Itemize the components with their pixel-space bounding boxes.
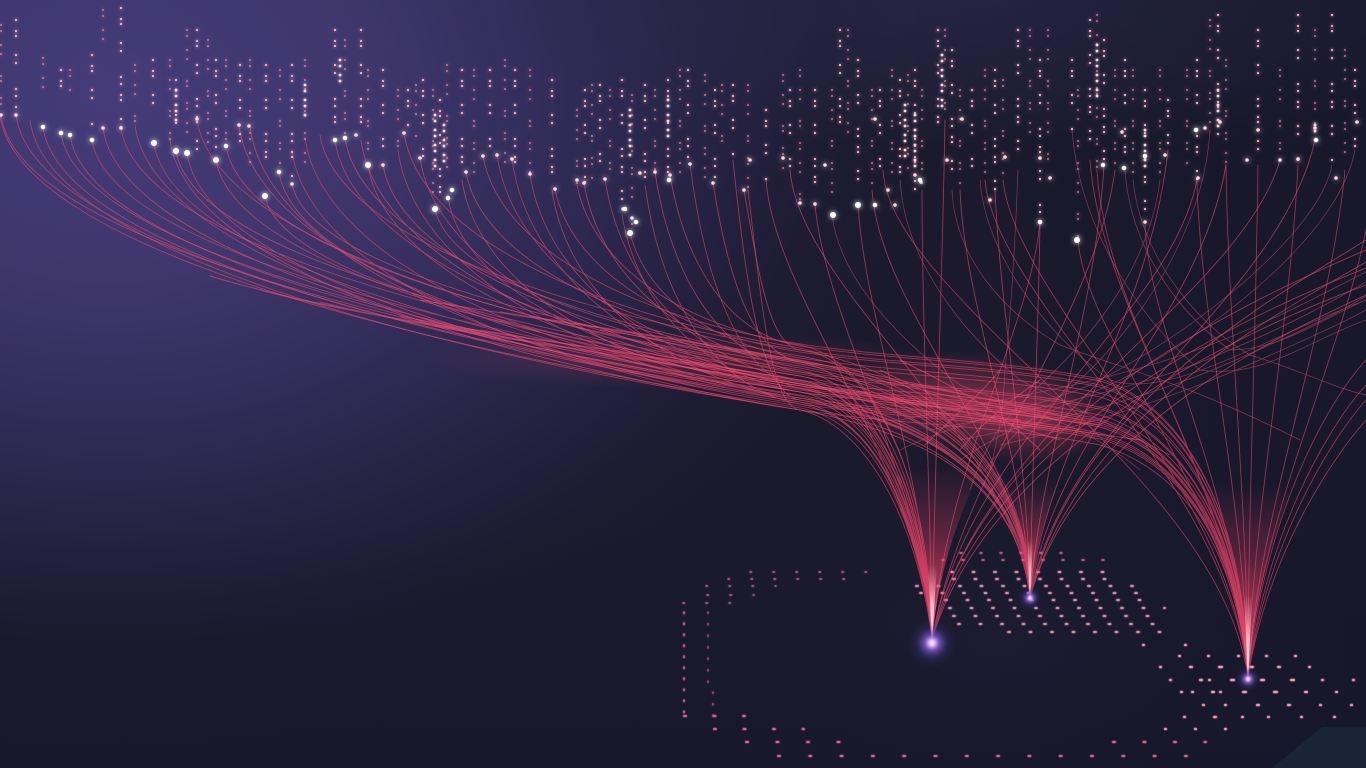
- stream curves into middle source: [1, 115, 1366, 598]
- middle source fan: [1005, 481, 1058, 610]
- crossing haze: [420, 332, 1120, 465]
- stream curves crossing toward upper right: [832, 130, 1366, 490]
- right source fan: [1195, 483, 1292, 692]
- bright end dots: [1, 115, 1357, 240]
- floor dot grid: [683, 553, 1354, 756]
- stream curves into right source: [16, 115, 1366, 678]
- stream curves into left source: [0, 115, 1366, 640]
- falling dot columns: [1, 8, 1355, 240]
- brightest central ribbon: [210, 276, 1140, 450]
- left source fan: [885, 465, 982, 667]
